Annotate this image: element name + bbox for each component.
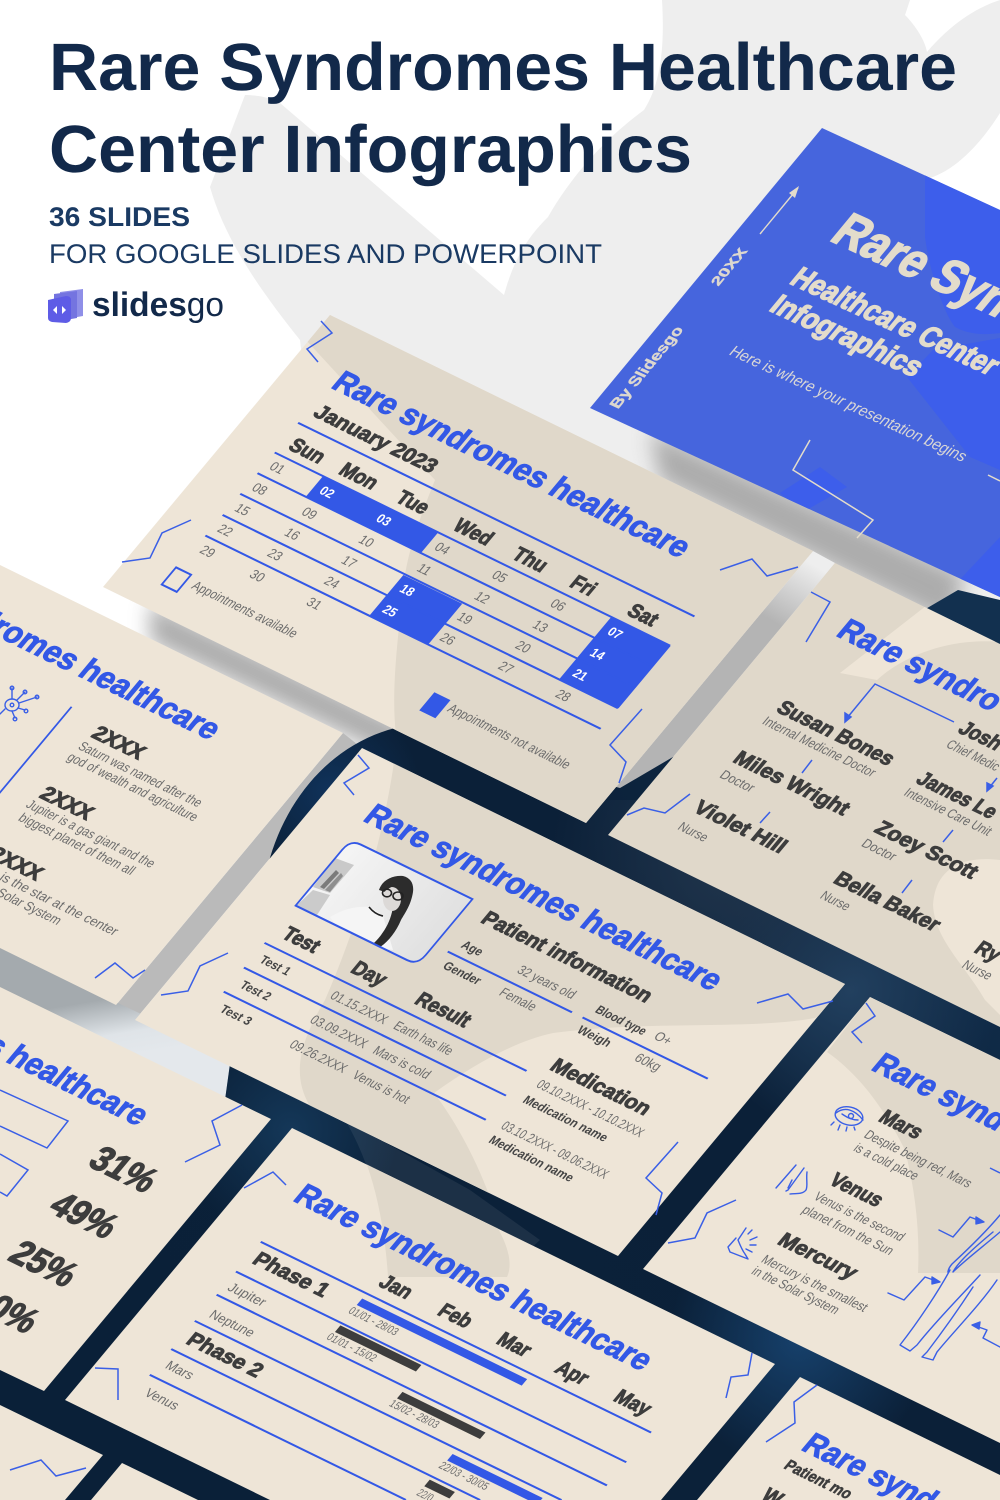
slide: bottom partial (91, 1463, 198, 1500)
calendar dates: 29 (197, 543, 219, 561)
slide: body icons: Mercury (773, 1228, 864, 1283)
slide: body icons: in the Solar System (748, 1264, 843, 1317)
gantt bars: 15/02 - 28/03 (387, 1397, 442, 1431)
patient information: Weigh (574, 1023, 614, 1050)
patient information (434, 904, 747, 1095)
slide: dates with virus icon: 2XXX (87, 721, 151, 763)
month label: January 2023 (309, 400, 443, 477)
legend: Appointments available (189, 578, 301, 641)
calendar dates: 01 (266, 459, 288, 477)
page title: Center Infographics (49, 112, 692, 187)
gantt bars: 01/01 - 28/03 (346, 1305, 402, 1338)
timeline rows: Phase 1 (248, 1248, 335, 1301)
timeline rows (134, 1242, 651, 1500)
slide: body icons: Mars (874, 1105, 929, 1143)
tests table (208, 918, 547, 1139)
slide: percentages: 31% (81, 1139, 167, 1200)
background swirl shape (210, 0, 1000, 800)
slide: blue cover: 20XX (708, 246, 751, 288)
gantt bars: 01/01 - 15/02 (324, 1331, 380, 1364)
medication: Medication name (520, 1093, 611, 1145)
tests table: 09.26.2XXX (286, 1037, 351, 1076)
slide: body icons: is a cold place (851, 1141, 922, 1183)
calendar dates: 15 (231, 501, 254, 519)
slide: team org chart: Nurse (959, 957, 996, 983)
calendar dates: 20 (512, 638, 534, 656)
weekday header: Wed (449, 514, 499, 550)
tests table: Venus is hot (349, 1068, 414, 1106)
slide: lower left partial (0, 1405, 103, 1500)
weekday header: Fri (565, 571, 602, 600)
calendar dates: 16 (281, 525, 303, 543)
light strip under dates slide (0, 945, 250, 1110)
month header: Jan (374, 1270, 419, 1303)
tests table: Test (278, 922, 326, 957)
calendar dates: 09 (298, 504, 321, 522)
calendar dates: 10 (355, 532, 377, 550)
weekday header: Tue (391, 486, 435, 518)
legend: Appointments not available (444, 701, 574, 772)
slide: body icons: planet from the Sun (799, 1203, 897, 1258)
slide: percentages (0, 933, 271, 1391)
patient information: Gender (440, 959, 484, 988)
calendar title: Rare syndromes healthcare (325, 365, 699, 564)
slide: dates with virus icon: biggest planet of them all (15, 810, 139, 878)
slide: percentages: 49% (41, 1185, 127, 1246)
timeline rows: Neptune (206, 1307, 258, 1340)
shadow band right of dates slide (116, 733, 362, 1020)
calendar dates: 19 (454, 609, 476, 627)
calendar dates: 28 (552, 687, 574, 705)
tests table: 03.09.2XXX (307, 1012, 371, 1051)
calendar dates: 24 (321, 574, 343, 592)
slide: team org chart: Miles Wright (729, 746, 855, 819)
calendar dates: 22 (214, 521, 236, 539)
patient information: Patient information (477, 907, 658, 1006)
timeline rows: Mars (162, 1358, 197, 1382)
tests table: Test 2 (237, 979, 274, 1003)
slide: team org chart: Nurse (817, 888, 854, 914)
patient information: Blood type (592, 1003, 650, 1038)
slide: blue cover: Here is where your presentation begins (725, 343, 971, 465)
icon: nose (728, 1228, 757, 1259)
slide: team org chart: Violet Hill (689, 796, 793, 857)
slide: calendar (103, 300, 830, 850)
medication: 03.10.2XXX - 09.06.2XXX (498, 1119, 612, 1182)
calendar dates: 03 (373, 512, 394, 529)
slide: blue cover: By Slidesgo (606, 324, 687, 411)
slide: body icons: Venus is the second (811, 1189, 908, 1244)
month header: Feb (433, 1299, 478, 1332)
patient title: Rare syndromes healthcare (357, 798, 731, 997)
navy backdrop (0, 590, 1000, 1500)
tests table: Test 3 (217, 1003, 255, 1028)
slide: team org chart (608, 563, 1000, 1027)
gantt bars (258, 1297, 609, 1500)
calendar dates: 11 (414, 561, 435, 578)
shadow band right of calendar slide (586, 551, 835, 835)
slide: body icons: Despite being red, Mars (861, 1127, 976, 1190)
outlined bars (0, 1090, 68, 1196)
timeline rows: Jupiter (224, 1280, 270, 1309)
timeline rows: Phase 2 (182, 1328, 269, 1381)
tests table: Earth has life (390, 1018, 457, 1058)
subtitle: FOR GOOGLE SLIDES AND POWERPOINT (49, 239, 602, 269)
calendar dates: 18 (396, 582, 418, 599)
org chart connectors (760, 684, 997, 893)
weekday header: Sun (284, 434, 331, 467)
slide: team org chart: Zoey Scott (870, 816, 984, 883)
shadow under calendar slide (150, 602, 420, 762)
slide: team org chart: Internal Medicine Doctor (759, 714, 879, 780)
slide: body icons: Venus (825, 1168, 889, 1211)
tests table: Result (410, 988, 477, 1031)
slidesgo logo: slidesgo (92, 286, 224, 324)
slide: blue cover: Infographics (764, 288, 932, 383)
patient photo (294, 842, 474, 963)
medication (486, 1054, 666, 1196)
slide: gantt timeline (65, 1128, 775, 1500)
slide: team org chart: Nurse (675, 819, 712, 845)
calendar lines (204, 423, 694, 729)
calendar dates: 08 (249, 480, 271, 498)
icon: virus (0, 686, 39, 721)
patient information: Female (496, 985, 540, 1014)
calendar dates: 21 (569, 666, 591, 684)
slide: dates with virus icon: Jupiter is a gas giant and the (23, 797, 159, 871)
calendar dates: 06 (547, 596, 569, 614)
icon: body outline with arrows (888, 1215, 1000, 1360)
icon: eye (831, 1104, 865, 1131)
calendar dates: 17 (338, 553, 360, 571)
timeline rows: Venus (141, 1386, 183, 1413)
calendar dates: 23 (264, 546, 286, 564)
slide: dates with virus icon (0, 547, 343, 1005)
tests table: 01.15.2XXX (327, 988, 391, 1027)
calendar dates: 31 (303, 595, 325, 613)
slide: percentages: 25% (1, 1233, 87, 1294)
slide: body icons (643, 997, 1000, 1443)
slide: team org chart: Intensive Care Unit (901, 785, 995, 839)
calendar dates: 27 (495, 659, 517, 677)
slide: dates with virus icon: god of wealth and agriculture (64, 750, 202, 824)
slide: dates with virus icon: 2XXX (35, 782, 99, 824)
page title (49, 30, 957, 187)
slide: dates with virus icon: Saturn was named after the (75, 739, 206, 810)
month header: Apr (551, 1356, 595, 1389)
slide: patient record (135, 748, 860, 1270)
calendar dates: 25 (379, 603, 401, 620)
tests table: Day (347, 957, 393, 990)
slide: team org chart: Susan Bones (772, 696, 900, 770)
page title: Rare Syndromes Healthcare (49, 30, 957, 105)
icon: legs (776, 1165, 807, 1194)
slide: team org chart: Bella Baker (829, 867, 946, 935)
calendar dates: 12 (471, 589, 493, 607)
calendar dates: 04 (431, 540, 453, 558)
calendar dates: 07 (604, 625, 626, 642)
slide: team org chart: Rare syndro (830, 613, 1000, 718)
calendar dates: 30 (246, 567, 268, 585)
calendar dates: 02 (316, 484, 338, 501)
weekday header: Thu (508, 543, 554, 576)
patient information: 60kg (631, 1050, 665, 1074)
slide: team org chart: Doctor (858, 836, 900, 864)
month header (374, 1270, 658, 1420)
slide: patient monitoring (697, 1377, 1000, 1500)
shadow under blue cover slide (650, 430, 965, 625)
calendar dates: 13 (529, 617, 551, 635)
patient information: Age (458, 938, 486, 959)
unavailable date blocks (254, 476, 671, 729)
slide: body icons: Mercury is the smallest (758, 1252, 871, 1315)
patient information: 32 years old (514, 963, 579, 1002)
subtitle (49, 202, 602, 269)
slide: gantt timeline: Rare syndromes healthcare (287, 1178, 661, 1377)
legend (162, 566, 574, 778)
calendar dates: 14 (587, 646, 608, 663)
tests table: Mars is cold (370, 1043, 434, 1082)
month header: Mar (492, 1328, 537, 1361)
calendar dates: 26 (436, 630, 459, 648)
weekday header: Sat (623, 599, 664, 630)
subtitle: 36 SLIDES (49, 202, 190, 232)
gantt bars: 22/03 - 30/05 (436, 1459, 492, 1492)
medication: Medication name (486, 1133, 577, 1185)
slide: blue cover (590, 128, 1000, 610)
weekday header (284, 434, 664, 630)
patient information: O+ (651, 1029, 676, 1048)
weekday header: Mon (335, 458, 384, 493)
calendar dates: 05 (489, 568, 511, 586)
tests table: Test 1 (256, 953, 294, 978)
slide: team org chart: Doctor (717, 767, 758, 795)
medication: Medication (546, 1054, 657, 1119)
medication: 09.10.2XXX - 10.10.2XXX (533, 1077, 648, 1140)
month header: May (609, 1385, 658, 1420)
calendar dates (197, 459, 626, 726)
